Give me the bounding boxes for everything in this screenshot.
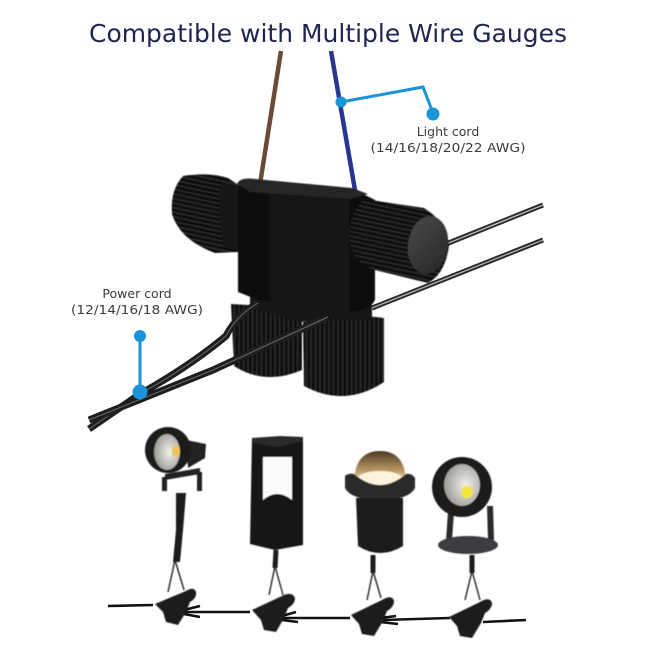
head — [145, 427, 191, 473]
window — [263, 457, 292, 500]
flange — [345, 474, 415, 501]
left neck — [219, 182, 240, 250]
callout: power cord — [132, 330, 148, 400]
body — [356, 498, 403, 553]
dome — [354, 451, 406, 484]
light 1: spotlight — [145, 427, 206, 562]
left knob — [172, 174, 240, 253]
top cap — [252, 436, 303, 447]
blue light wire — [331, 51, 356, 196]
light 4: spotlight on base — [432, 457, 498, 573]
connector body — [238, 180, 375, 313]
junction connector — [172, 174, 452, 396]
lens — [154, 434, 180, 470]
label: light cord: (14/16/18/20/22 AWG) — [370, 140, 526, 155]
lens — [444, 464, 480, 506]
stand — [446, 506, 494, 540]
label: power cord: (12/14/16/18 AWG) — [71, 302, 203, 317]
light 3: well light — [345, 451, 415, 573]
light 2: bollard — [250, 436, 303, 568]
cable — [470, 555, 474, 573]
light 1 leads and connector — [155, 560, 196, 625]
lower left knob — [231, 304, 302, 377]
right knob cap — [404, 213, 452, 277]
light 2 leads and connector — [252, 566, 295, 632]
callout: light cord — [336, 87, 440, 120]
housing — [250, 437, 303, 550]
mount — [186, 440, 206, 468]
stake — [173, 493, 186, 562]
lower collar — [250, 296, 372, 322]
title: Compatible with Multiple Wire Gauges — [89, 19, 567, 48]
right knob — [349, 199, 449, 283]
glowing glass — [357, 471, 403, 487]
power cord right ends — [372, 205, 543, 308]
bracket — [162, 468, 202, 491]
low-voltage cable run — [108, 605, 526, 624]
cable — [370, 555, 376, 573]
LED — [172, 445, 180, 457]
light 3 leads and connector — [351, 571, 394, 636]
brown light wire — [260, 51, 281, 184]
label: power cord: Power cord — [102, 286, 172, 301]
base — [438, 536, 498, 554]
lower right knob — [303, 316, 384, 396]
LED — [461, 486, 473, 498]
body top face — [237, 179, 368, 199]
label: light cord: Light cord — [417, 124, 479, 139]
light 4 leads and connector — [449, 571, 492, 638]
head — [432, 457, 492, 517]
power cords left — [89, 303, 328, 429]
cable — [275, 550, 276, 568]
